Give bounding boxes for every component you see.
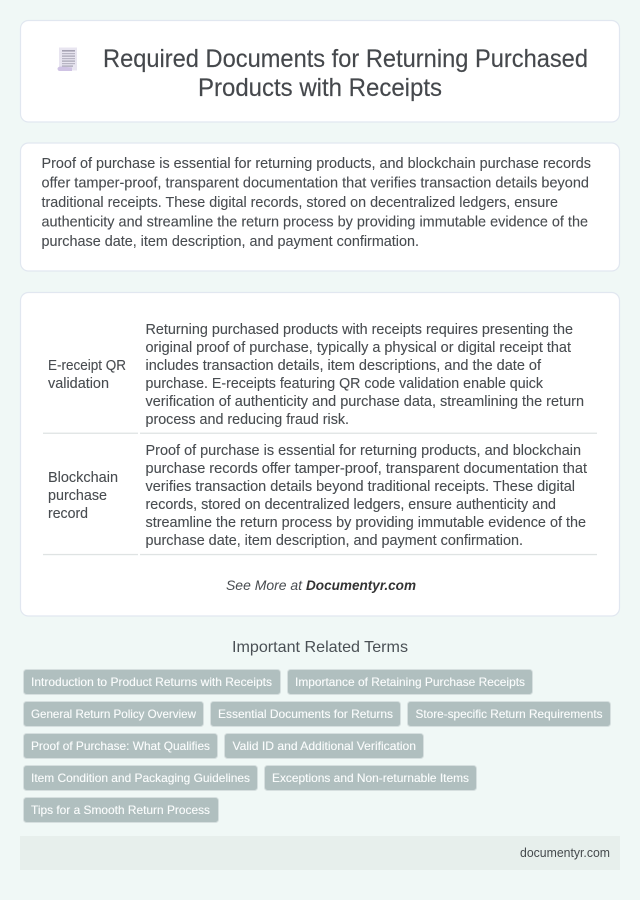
see more link: Documentyr.com — [306, 577, 416, 593]
row description: E-receipt QR validation: purchase. E-receipts featuring QR code validation enable quick — [146, 376, 544, 392]
chip — [24, 798, 218, 822]
chip — [288, 670, 532, 694]
chip — [264, 766, 476, 790]
title — [103, 45, 588, 102]
text block: introduction paragraph: traditional receipts. These digital records, stored on decentralized ledgers, ensure — [42, 194, 558, 211]
row description: E-receipt QR validation — [146, 322, 584, 428]
row label: Blockchain purchase record: record — [48, 506, 88, 522]
row label: Blockchain purchase record — [48, 470, 118, 522]
row label: Blockchain purchase record: purchase — [48, 488, 107, 504]
footer — [20, 836, 620, 870]
table row: Blockchain purchase record — [48, 443, 587, 549]
row description: E-receipt QR validation: original proof of purchase, typically a physical or digital receipt that — [146, 340, 571, 356]
row label: E-receipt QR validation — [48, 358, 126, 392]
chip — [408, 702, 610, 726]
panel: document table — [20, 292, 620, 616]
text block: introduction paragraph: authenticity and streamline the return process by providing immutable evidence of the — [42, 214, 588, 230]
row description: Blockchain purchase record: purchase date, item description, and payment confirmation. — [146, 533, 523, 549]
chip: Item Condition and Packaging Guidelines — [31, 771, 250, 785]
row description: Blockchain purchase record: purchase records offer tamper-proof, transparent documentation that — [146, 461, 587, 477]
chip — [24, 734, 218, 758]
footer: documentyr.com — [520, 846, 610, 860]
panel: introduction — [20, 143, 620, 271]
chip: Valid ID and Additional Verification — [232, 739, 416, 753]
icon: paper receipt — [58, 48, 77, 71]
row description: Blockchain purchase record: records, stored on decentralized ledgers, ensure authenticity and — [146, 497, 556, 513]
row description: Blockchain purchase record: Proof of purchase is essential for returning products, and blockchain — [146, 443, 581, 459]
heading: important related terms: Important Related Terms — [232, 639, 408, 656]
related terms chips — [24, 670, 610, 822]
chip: Store-specific Return Requirements — [416, 707, 602, 721]
chip: Essential Documents for Returns — [218, 707, 393, 721]
text block: introduction paragraph: offer tamper-proof, transparent documentation that verifies transaction details beyond — [42, 174, 589, 192]
see more link — [226, 577, 416, 593]
row description: Blockchain purchase record: streamline the return process by providing immutable evidence of the — [146, 515, 586, 531]
chip: Tips for a Smooth Return Process — [31, 803, 210, 817]
row description: E-receipt QR validation: process and reducing fraud risk. — [146, 412, 349, 428]
row description: E-receipt QR validation: verification of authenticity and purchase data, streamlining the return — [146, 394, 584, 410]
row description: Blockchain purchase record: verifies transaction details beyond traditional receipts. These digital — [146, 479, 575, 495]
chip: Importance of Retaining Purchase Receipts — [295, 675, 525, 689]
chip: General Return Policy Overview — [31, 707, 196, 721]
row description: E-receipt QR validation: Returning purchased products with receipts requires presenting the — [146, 322, 573, 338]
chip — [210, 702, 400, 726]
row label: E-receipt QR validation: validation — [48, 376, 109, 392]
title: Products with Receipts — [198, 74, 442, 102]
chip — [24, 670, 280, 694]
panel: title card — [20, 20, 620, 122]
row description: Blockchain purchase record — [146, 443, 587, 549]
chip — [24, 766, 258, 790]
table row: E-receipt QR validation — [48, 322, 584, 428]
text block: introduction paragraph: Proof of purchase is essential for returning products, and blockchain purchase records — [42, 155, 591, 172]
chip — [224, 734, 424, 758]
row label: E-receipt QR validation: E-receipt QR — [48, 358, 126, 374]
text block: introduction paragraph: purchase date, item description, and payment confirmation. — [42, 233, 419, 250]
chip: Introduction to Product Returns with Receipts — [31, 675, 272, 689]
text block: introduction paragraph — [42, 155, 591, 250]
row label: Blockchain purchase record: Blockchain — [48, 470, 118, 486]
see more link: See More at — [226, 577, 303, 593]
chip: Proof of Purchase: What Qualifies — [31, 739, 210, 753]
title: Required Documents for Returning Purchased — [103, 45, 588, 73]
chip: Exceptions and Non-returnable Items — [272, 771, 469, 785]
chip — [24, 702, 204, 726]
row description: E-receipt QR validation: includes transaction details, item descriptions, and the date of — [146, 358, 542, 374]
